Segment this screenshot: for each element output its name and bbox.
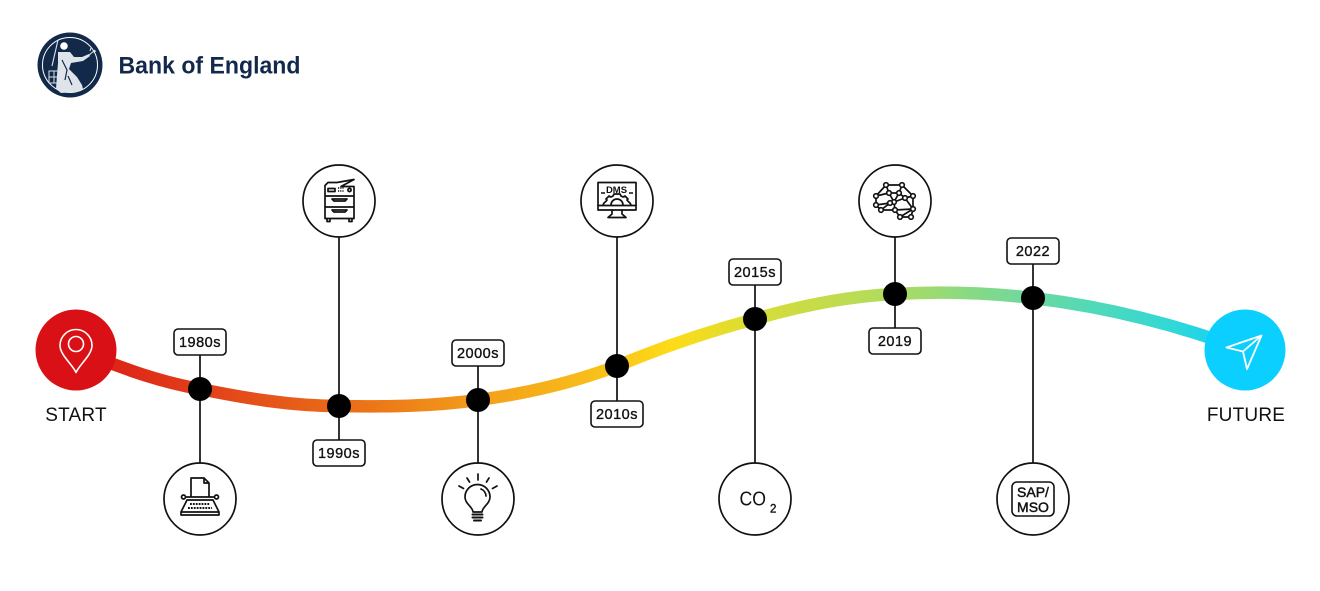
icon: SAP/MSO: MSO [1017,499,1049,515]
future marker [1204,310,1286,426]
node [743,307,767,331]
icon: DMS monitor [581,165,653,237]
icon: SAP/MSO [997,463,1069,535]
connector [477,366,479,464]
logo wordmark: Bank of England [118,52,300,80]
icon: neural network [859,165,931,237]
connector [754,285,756,464]
connector [199,355,201,464]
date label [869,328,921,354]
start circle [36,310,116,390]
start marker [36,310,116,426]
node [327,394,351,418]
icon: location pin [60,330,92,372]
gradient timeline curve [76,293,1245,406]
connector [616,237,618,401]
node [466,388,490,412]
icon: CO2: 2 [770,504,776,516]
logo roundel [38,32,102,98]
milestone 2019 [859,165,931,354]
icon: DMS monitor: DMS [606,185,627,196]
icon: photocopier [303,165,375,237]
date label: 2010s [596,407,638,423]
start label: START [45,405,107,426]
logo: Bank of England [38,32,300,98]
icon: paper plane [1226,336,1262,369]
date label [591,401,643,427]
icon: light bulb [442,463,514,535]
node [188,377,212,401]
date label [729,259,781,285]
node [883,282,907,306]
date label: 2019 [878,334,912,350]
icon: SAP/MSO: SAP/ [1017,484,1049,500]
connector [338,237,340,440]
icon: CO2: CO [740,488,766,510]
milestone 2000s [442,340,514,535]
connector [894,237,896,328]
future circle [1204,310,1286,390]
milestone 1980s [164,329,236,535]
connector [1032,264,1034,464]
date label [1007,238,1059,264]
milestone 2022 [997,238,1069,535]
date label [174,329,226,355]
future label: FUTURE [1207,405,1285,426]
date label: 2022 [1016,244,1050,260]
milestone 1990s [303,165,375,466]
date label [313,440,365,466]
milestone 2010s [581,165,653,427]
date label: 1980s [179,335,221,351]
date label [452,340,504,366]
date label: 1990s [318,446,360,462]
node [1021,286,1045,310]
node [605,354,629,378]
date label: 2000s [457,346,499,362]
icon: typewriter [164,463,236,535]
date label: 2015s [734,265,776,281]
icon: CO2 [719,463,791,535]
milestone 2015s [719,259,791,535]
